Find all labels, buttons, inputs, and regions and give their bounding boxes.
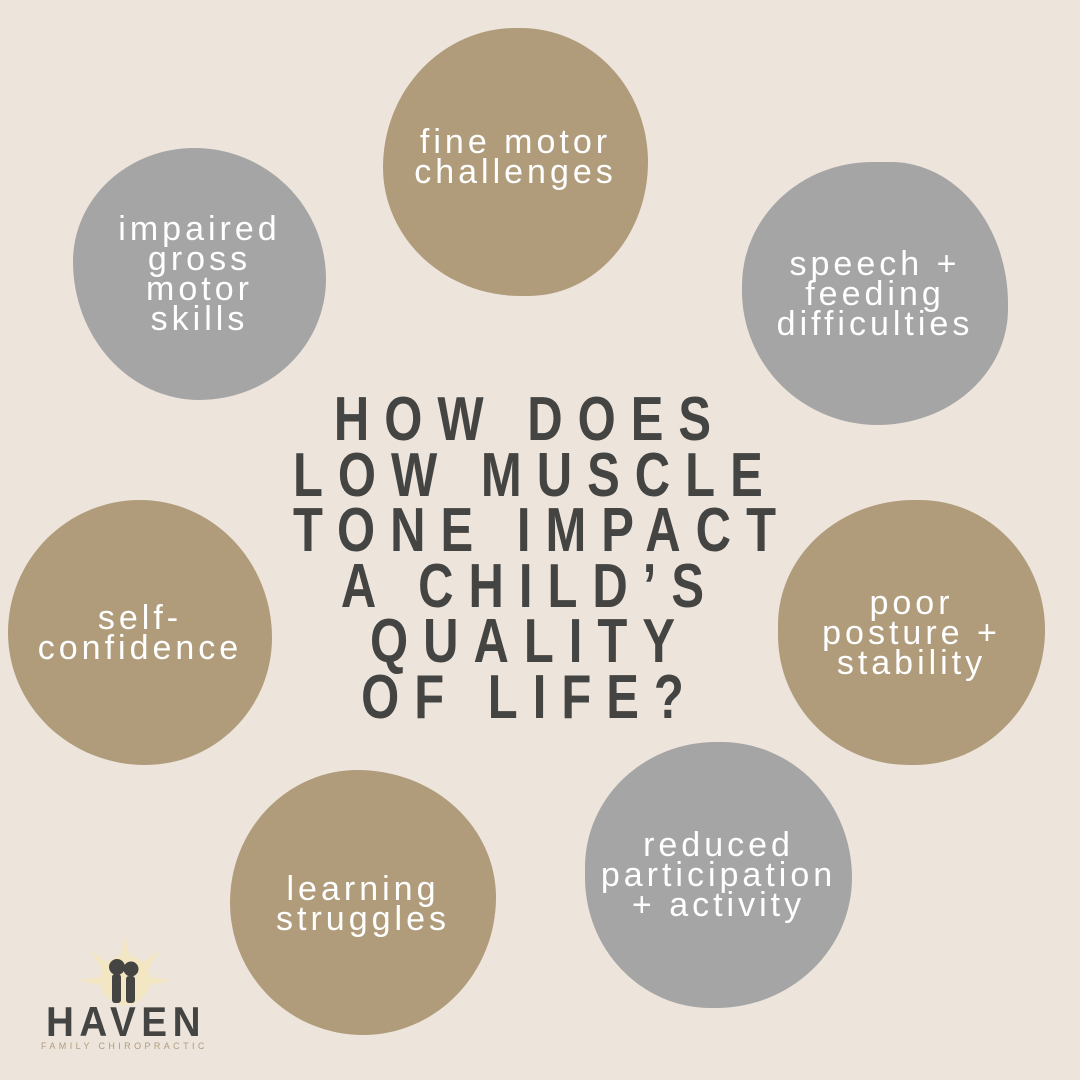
title: A CHILD’S <box>341 552 719 620</box>
logo <box>41 936 208 1051</box>
blob: poor posture + stability <box>778 500 1045 765</box>
blob: speech + feeding difficulties <box>742 162 1008 425</box>
blob: self-confidence: self- <box>98 598 182 636</box>
title: LOW MUSCLE <box>293 440 778 510</box>
blob: learning struggles: learning <box>286 870 439 908</box>
blob: learning struggles: struggles <box>276 900 450 938</box>
blob: speech + feeding difficulties: feeding <box>805 274 945 312</box>
logo text: HAVEN: HAVEN <box>46 998 206 1045</box>
logo text: family chiropractic: FAMILY CHIROPRACTIC <box>41 1041 208 1051</box>
blob: speech + feeding difficulties: speech + <box>790 244 960 282</box>
blob: impaired gross motor skills: skills <box>151 300 248 338</box>
blob: reduced participation + activity: reduced <box>643 826 794 864</box>
blob: learning struggles <box>230 770 496 1035</box>
title <box>293 385 791 732</box>
blob: speech + feeding difficulties: difficulties <box>777 304 973 342</box>
blob: fine motor challenges <box>383 28 648 296</box>
blob: impaired gross motor skills: gross <box>148 240 251 278</box>
blob: reduced participation + activity: + activity <box>632 886 805 924</box>
blob: poor posture + stability: posture + <box>822 614 1001 652</box>
blob: fine motor challenges: fine motor <box>420 123 611 161</box>
title: QUALITY <box>370 607 690 676</box>
blob: self-confidence <box>8 500 272 765</box>
blob: reduced participation + activity <box>585 742 852 1008</box>
icon: sun and children <box>78 936 172 1005</box>
blob: poor posture + stability: stability <box>837 644 986 682</box>
blob: impaired gross motor skills: impaired <box>118 210 281 248</box>
title: HOW DOES <box>334 385 726 454</box>
blob: reduced participation + activity: participation <box>601 856 836 894</box>
blob: self-confidence: confidence <box>38 628 242 666</box>
blob: fine motor challenges: challenges <box>414 153 617 191</box>
title: OF LIFE? <box>361 662 699 732</box>
blob: impaired gross motor skills: motor <box>146 270 253 308</box>
blob: impaired gross motor skills <box>73 148 326 400</box>
title: TONE IMPACT <box>293 496 791 565</box>
blob: poor posture + stability: poor <box>869 584 954 622</box>
